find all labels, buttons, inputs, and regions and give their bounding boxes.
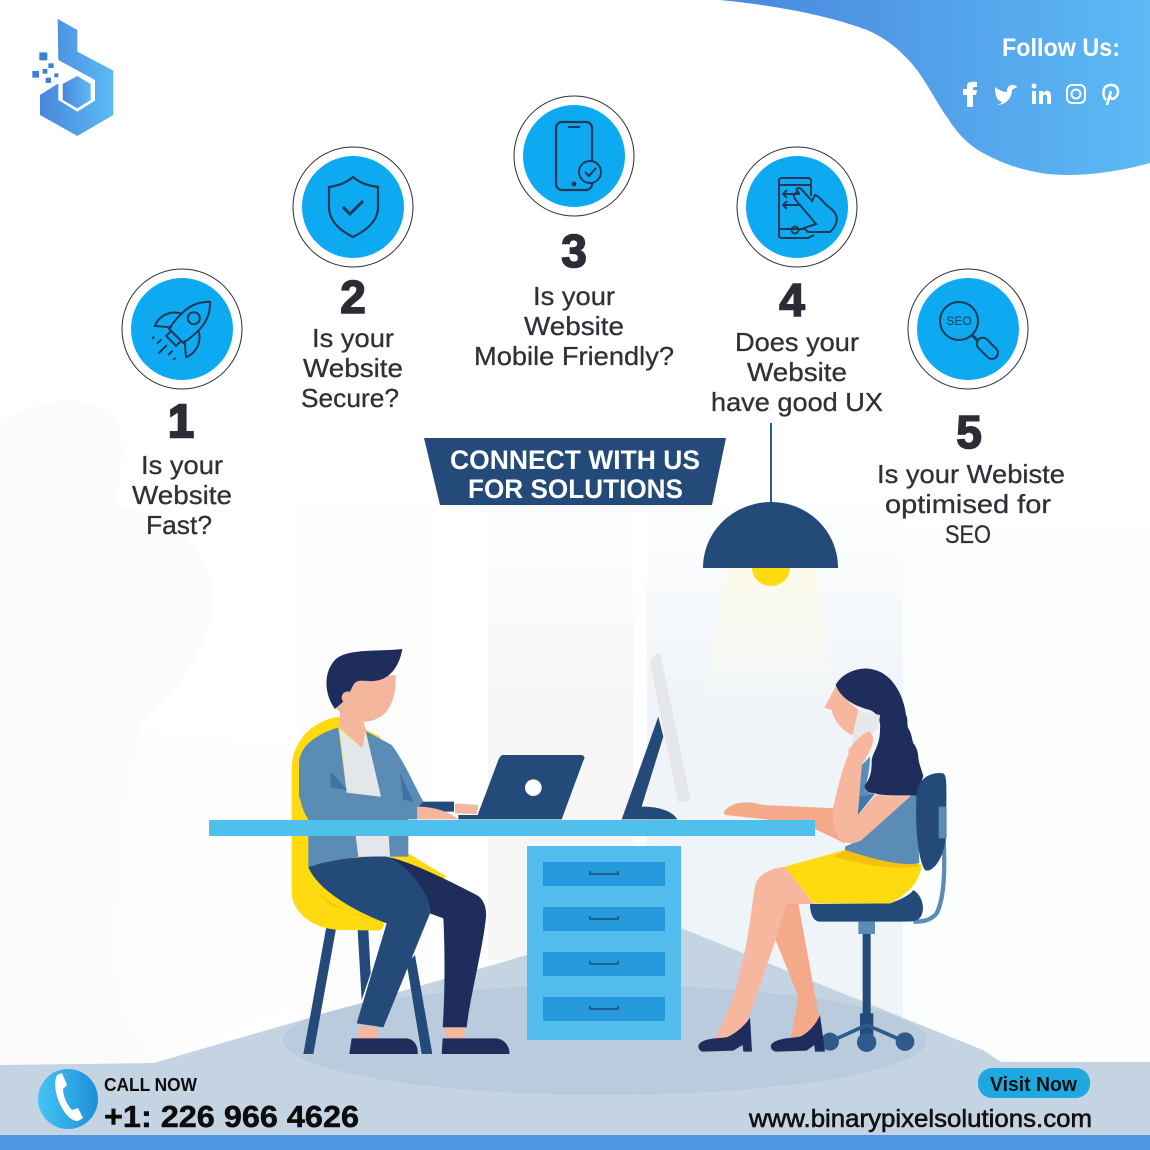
item 2: secure — [293, 147, 413, 413]
text: is your website fast: Is your — [141, 450, 223, 480]
office chair — [810, 837, 944, 1052]
text: is your website secure: Website — [303, 353, 403, 383]
text: is your webiste optimised for seo — [877, 459, 1065, 549]
text: is your website mobile friendly: Mobile Friendly? — [474, 341, 674, 371]
icon: SEO magnifier in circle: SEO — [946, 314, 972, 328]
number 3: 3 — [561, 225, 587, 277]
floor — [0, 928, 1150, 1135]
heading: follow us: Follow Us: — [1002, 34, 1120, 62]
icon: facebook — [963, 82, 977, 107]
logo — [32, 19, 113, 136]
text: is your website mobile friendly — [474, 281, 674, 371]
call now block — [38, 1069, 359, 1134]
text: is your website fast: Website — [132, 480, 232, 510]
top-right blue wave — [720, 0, 1150, 175]
text: phone number: +1: 226 966 4626 — [104, 1099, 359, 1134]
icon: rocket in circle — [122, 269, 242, 389]
icon: SEO magnifier in circle — [908, 269, 1028, 389]
text: is your website secure: Secure? — [301, 383, 399, 413]
item 4: good UX — [711, 147, 883, 417]
footer bar — [0, 1135, 1150, 1150]
banner: connect with us — [424, 438, 726, 505]
text: is your website fast — [132, 450, 232, 540]
desk top — [209, 820, 815, 836]
number 1: 1 — [168, 395, 194, 447]
woman on phone with monitor — [622, 654, 947, 1052]
text: does your website have good ux: Website — [747, 357, 847, 387]
item 5: SEO — [877, 269, 1065, 549]
text: does your website have good ux: have good UX — [711, 387, 883, 417]
text: does your website have good ux — [711, 327, 883, 417]
icon: linkedin — [1032, 84, 1051, 104]
text: is your webiste optimised for seo: SEO — [945, 521, 991, 549]
text: is your website mobile friendly: Is your — [533, 281, 615, 311]
text: is your website secure: Is your — [312, 323, 394, 353]
icon: phone in circle — [514, 96, 634, 216]
text: does your website have good ux: Does your — [735, 327, 859, 357]
icon: instagram — [1067, 85, 1085, 103]
hanging lamp — [703, 423, 838, 700]
item 1: fast — [122, 269, 242, 540]
icon: phone badge — [38, 1069, 98, 1129]
text: is your website fast: Fast? — [146, 510, 212, 540]
icon: shield in circle — [293, 147, 413, 267]
text: is your website secure — [301, 323, 403, 413]
number 5: 5 — [956, 406, 982, 458]
number 4: 4 — [779, 274, 805, 326]
social icons — [963, 82, 1118, 107]
man at laptop — [292, 649, 584, 1054]
text: is your webiste optimised for seo: optimised for — [885, 489, 1051, 519]
button: visit now: Visit Now — [990, 1074, 1077, 1096]
icon: hand on phone in circle — [737, 147, 857, 267]
icon: twitter — [995, 85, 1017, 105]
text: website url: www.binarypixelsolutions.com — [748, 1105, 1092, 1133]
woman upper body — [824, 669, 923, 864]
icon: pinterest — [1103, 85, 1118, 105]
banner: connect with us: CONNECT WITH US — [450, 445, 700, 475]
item 3: mobile friendly — [474, 96, 674, 371]
visit now block — [748, 1068, 1092, 1133]
button: visit now — [978, 1068, 1090, 1098]
text: is your website mobile friendly: Website — [524, 311, 624, 341]
filing drawers — [527, 846, 681, 1040]
number 2: 2 — [340, 271, 366, 323]
text: call now: CALL NOW — [104, 1075, 197, 1095]
banner: connect with us: FOR SOLUTIONS — [468, 474, 683, 504]
text: is your webiste optimised for seo: Is your Webiste — [877, 459, 1065, 489]
